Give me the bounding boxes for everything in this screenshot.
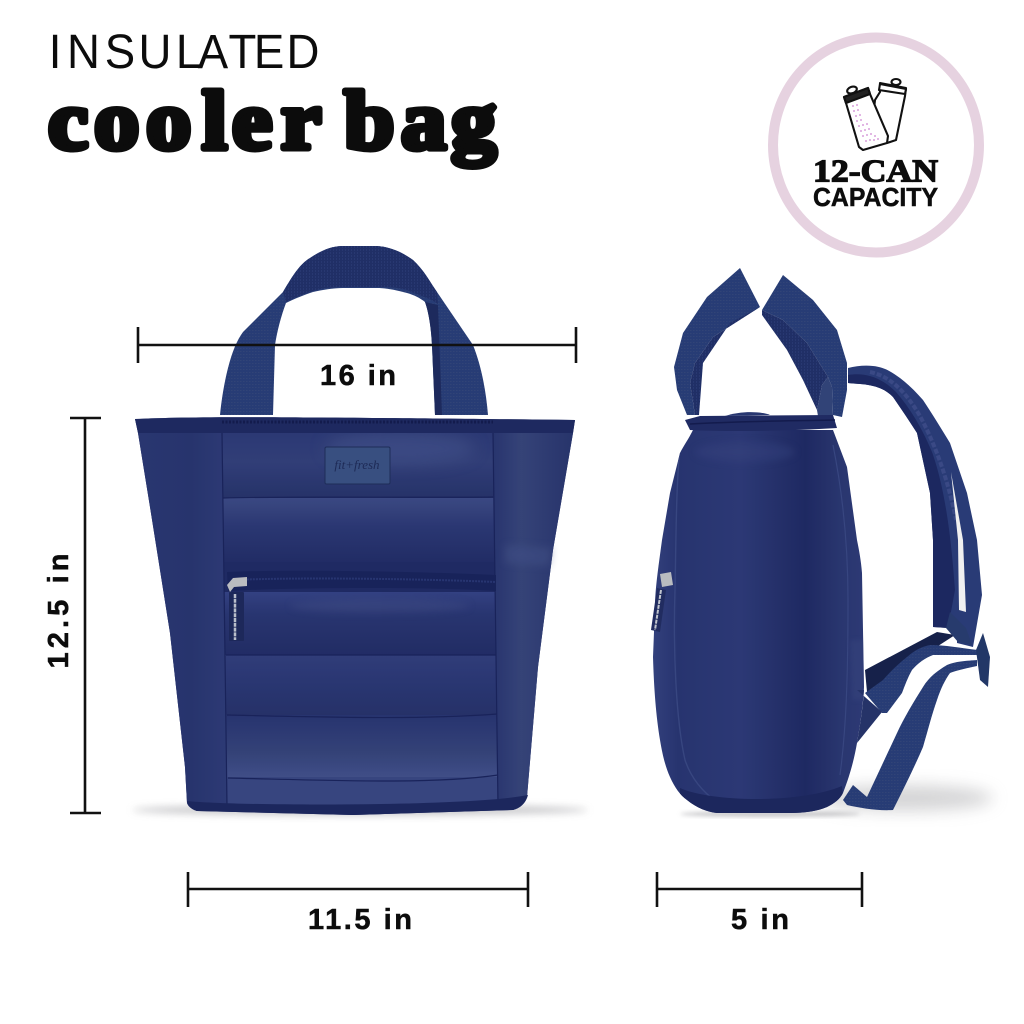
quilt seams: [222, 433, 498, 806]
badge text: 12-CAN: 12-CAN: [813, 152, 938, 188]
brand patch: [325, 447, 390, 484]
front view: tote bag: [132, 246, 588, 815]
side zipper pull: [651, 572, 673, 632]
title: INSULATED: INSULATED: [49, 25, 319, 78]
strap dark pad: [848, 374, 955, 628]
top band: [135, 417, 575, 433]
side top band: [685, 415, 837, 431]
right side panel: [493, 433, 573, 810]
left side panel: [138, 433, 227, 811]
body: [135, 417, 575, 815]
upper highlight: [770, 449, 786, 455]
badge: 12-can capacity: [773, 38, 979, 252]
patch over strap: [857, 690, 882, 743]
handle left light strap: [674, 268, 760, 415]
dimension: 11.5 in: [188, 872, 528, 936]
handle left dark strap: [690, 307, 760, 415]
brand name: fit+fresh: [334, 457, 380, 472]
side highlight: [505, 545, 552, 566]
badge text: CAPACITY: CAPACITY: [813, 182, 938, 212]
strap slit: [951, 472, 966, 612]
handle right light strap: [762, 275, 847, 417]
side bottom edge: [680, 786, 845, 815]
front zipper: [227, 571, 496, 641]
side body: [650, 428, 866, 816]
dimension: 12.5 in: [43, 418, 101, 813]
shadow: [817, 785, 993, 811]
handle tab: [817, 377, 833, 416]
dimension: 5 in: 5 in: [731, 904, 789, 936]
strap ripple edge: [870, 372, 956, 520]
badge ring: [773, 38, 979, 252]
bottom edge: [187, 795, 528, 815]
handle top band: [283, 246, 438, 304]
buckle: [976, 633, 990, 687]
quilted front panel: [215, 425, 505, 807]
handle right dark strap: [762, 310, 828, 410]
backpack shoulder strap: [848, 366, 982, 647]
icon: two cans: [844, 79, 906, 150]
shadow: [132, 805, 588, 815]
dimension: 12.5 in: 12.5 in: [43, 554, 75, 668]
dimension: 11.5 in: 11.5 in: [308, 904, 412, 936]
quilted edge seam: [674, 453, 710, 796]
middle webbing strap: [865, 645, 978, 713]
lower dark webbing: [865, 632, 955, 692]
dimension: 16 in: [138, 327, 576, 392]
side view: backpack: [650, 268, 993, 817]
patch highlight: [863, 640, 864, 698]
handle right fold: [425, 302, 442, 415]
tote handle: [220, 246, 488, 415]
lower strap: [843, 660, 977, 810]
title: cooler bag: cooler bag: [48, 74, 496, 167]
right edge seam: [833, 445, 848, 775]
dimension: 5 in: [657, 872, 862, 936]
dimension: 16 in: 16 in: [320, 360, 396, 392]
zipper pull: [227, 577, 247, 592]
